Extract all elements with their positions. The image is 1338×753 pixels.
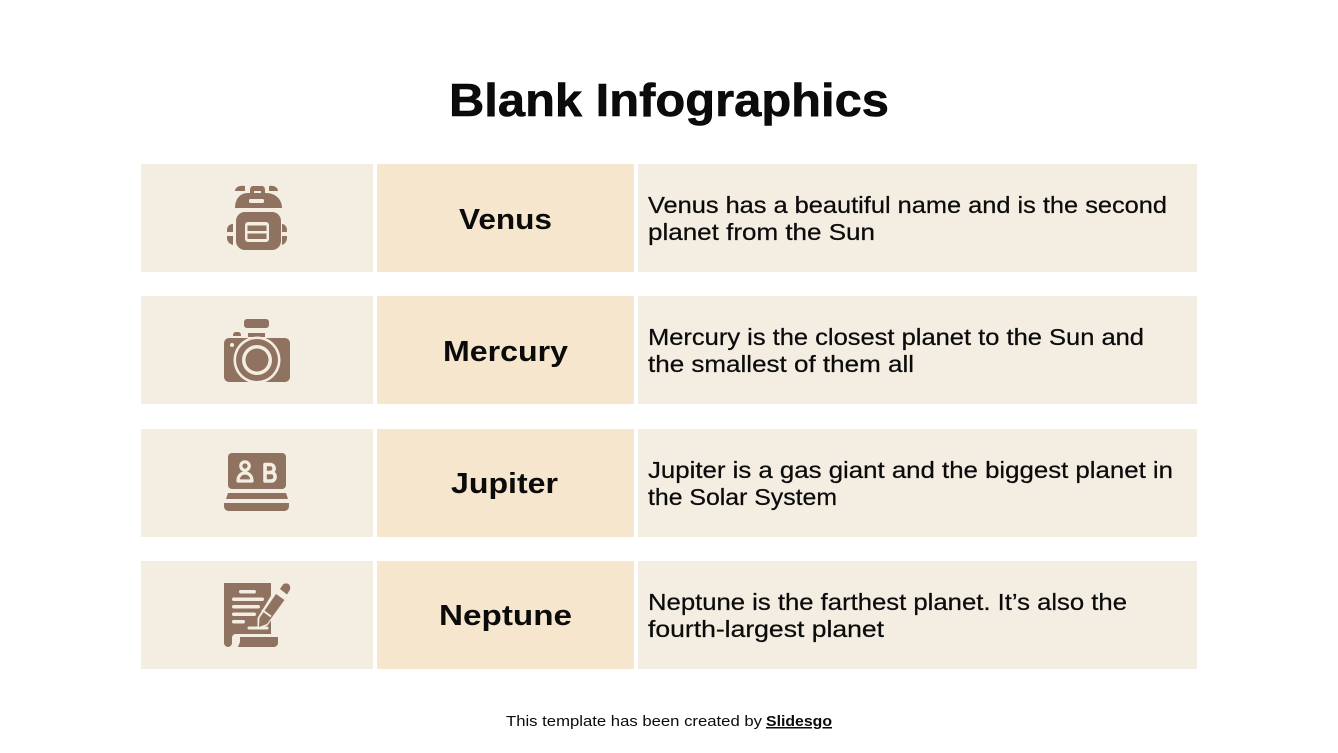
description: Neptune [648,589,1127,642]
icon: camera [224,319,290,384]
description cell: Mercury [638,296,1197,404]
name cell: Mercury [377,296,634,404]
description: Neptune: fourth-largest planet [648,616,885,642]
panel: Venus row [141,164,1197,272]
footer credit: This template has been created by [506,713,763,730]
label: Mercury: Mercury [443,336,568,368]
icon: alphabet book [224,453,289,511]
panel: Neptune row [141,561,1197,669]
description: Venus: planet from the Sun [648,219,875,245]
description: Venus [648,192,1167,245]
description: Mercury: the smallest of them all [648,351,914,377]
description: Jupiter: Jupiter is a gas giant and the biggest planet in [648,457,1173,483]
footer credit: Slidesgo [766,713,832,730]
icon cell: Venus [141,164,373,272]
description: Jupiter: the Solar System [648,484,837,510]
description cell: Jupiter [638,429,1197,537]
panel: Mercury row [141,296,1197,404]
name cell: Venus [377,164,634,272]
description: Jupiter [648,457,1173,510]
panel: Jupiter row [141,429,1197,537]
description: Mercury: Mercury is the closest planet to the Sun and [648,324,1144,350]
description: Venus: Venus has a beautiful name and is the second [648,192,1167,218]
description cell: Neptune [638,561,1197,669]
icon: backpack [227,186,287,250]
description: Mercury [648,324,1144,377]
icon cell: Neptune [141,561,373,669]
icon: document and pencil [224,583,290,647]
label: Jupiter: Jupiter [451,468,558,500]
label: Venus: Venus [459,204,552,236]
label: Neptune: Neptune [439,600,572,632]
name cell: Jupiter [377,429,634,537]
name cell: Neptune [377,561,634,669]
description cell: Venus [638,164,1197,272]
icon cell: Mercury [141,296,373,404]
title: Blank Infographics [449,74,889,126]
icon cell: Jupiter [141,429,373,537]
description: Neptune: Neptune is the farthest planet. It’s also the [648,589,1127,615]
